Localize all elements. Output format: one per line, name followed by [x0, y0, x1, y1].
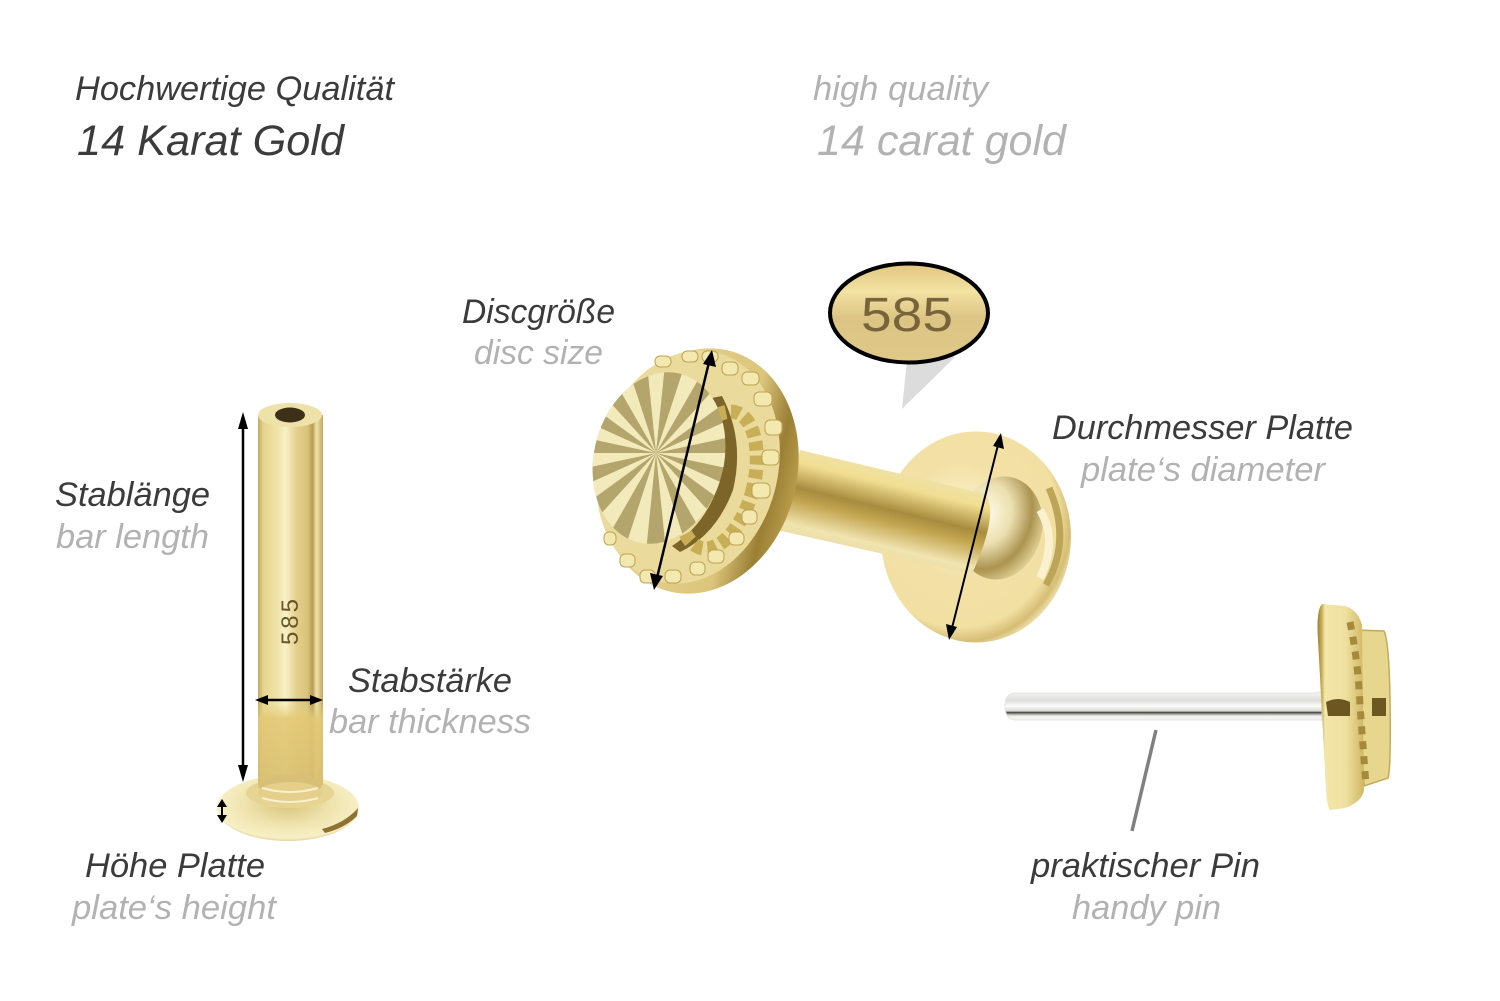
arrow: bar thickness: [255, 695, 323, 705]
connecting bar: [777, 450, 990, 574]
gold head front: [1318, 604, 1364, 810]
label: bar thickness: Stabstärke: [348, 662, 512, 700]
decorative disc: [592, 348, 799, 594]
silver pin: [1005, 692, 1322, 720]
label: plate height: [71, 847, 278, 927]
label: bar length: [55, 476, 210, 556]
heading: high quality, 14 carat gold: high quality: [813, 70, 990, 108]
heading: Hochwertige Qualität, 14 Karat Gold: 14 Karat Gold: [77, 117, 346, 165]
label: disc size: disc size: [474, 334, 603, 372]
callout: 585 hallmark: [830, 264, 988, 409]
heading: high quality, 14 carat gold: [813, 70, 1068, 165]
label: disc size: [462, 293, 615, 372]
arrow: plate diameter: [946, 433, 1004, 640]
label: bar thickness: [329, 662, 531, 741]
illustration: disc stud with plate: [592, 348, 1071, 642]
callout pointer: [902, 357, 955, 409]
label: plate diameter: Durchmesser Platte: [1052, 409, 1353, 447]
bead border: [604, 351, 782, 583]
label: plate diameter: plate‘s diameter: [1080, 451, 1327, 489]
round back plate: [881, 432, 1071, 642]
heading: high quality, 14 carat gold: 14 carat gold: [817, 117, 1068, 165]
engraving: 585 on bar: 585: [277, 596, 304, 645]
label: plate height: plate‘s height: [71, 889, 278, 927]
gold head back step: [1355, 630, 1390, 786]
label: bar length: bar length: [56, 518, 209, 556]
illustration: pin with gold head: [1005, 604, 1390, 810]
sunburst face: [592, 372, 726, 544]
hallmark number: 585: [861, 289, 953, 342]
illustration: threaded bar with flat plate: [217, 403, 359, 841]
heading: Hochwertige Qualität, 14 Karat Gold: Hochwertige Qualität: [75, 70, 396, 108]
arrow: plate height: [217, 799, 227, 823]
label: plate diameter: [1052, 409, 1353, 489]
label: disc size: Discgröße: [462, 293, 615, 331]
label: handy pin: [1030, 847, 1260, 927]
label: bar length: Stablänge: [55, 476, 210, 514]
arrow: bar length: [238, 412, 248, 782]
label: handy pin: praktischer Pin: [1030, 847, 1260, 885]
label: bar thickness: bar thickness: [329, 703, 531, 741]
heading: Hochwertige Qualität, 14 Karat Gold: [75, 70, 396, 165]
label: handy pin: handy pin: [1072, 889, 1221, 927]
label: plate height: Höhe Platte: [85, 847, 265, 885]
arrow: disc size: [650, 350, 716, 590]
pointer line: handy pin: [1132, 730, 1156, 831]
dark crevice behind face: [672, 396, 737, 552]
